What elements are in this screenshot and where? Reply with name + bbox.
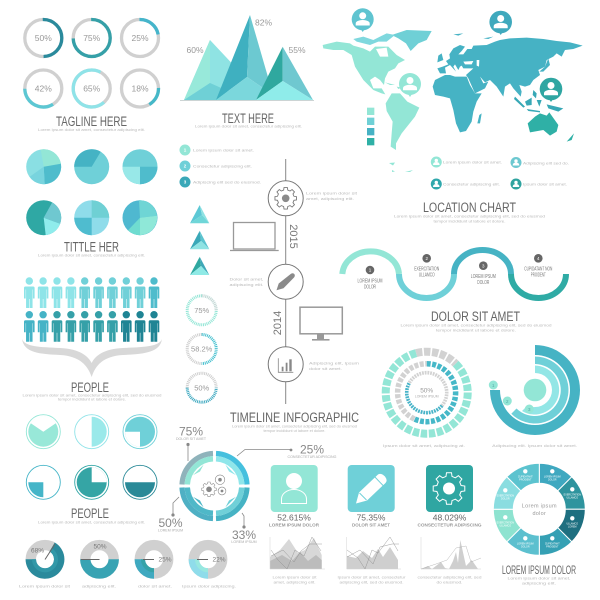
step 4 [524, 254, 552, 278]
fraction circle 3 [123, 415, 157, 449]
step 1: LOREM IPSUM [358, 278, 383, 284]
chart caption 3: consectetur adipiscing elit, sed [418, 574, 482, 580]
callout 25%: 25% [300, 442, 324, 456]
chart caption 3 [418, 574, 482, 584]
chart: area 1 [270, 537, 325, 569]
Japan [539, 58, 550, 72]
Eurasia [437, 38, 583, 97]
Australia [528, 112, 574, 142]
step 3: 3 [482, 263, 485, 268]
donut 50%: 50% [93, 544, 107, 550]
donut 68%: 68% [31, 548, 44, 554]
numbered list: Lorem ipsum dolor sit amet. [193, 148, 254, 152]
text: caption: Lorem ipsum dolor sit amet, consectetur adipiscing elit. [38, 252, 145, 258]
panel: people pictogram [22, 277, 162, 377]
value: 52.615% [277, 513, 311, 523]
segment labels: CUPIDATANT [545, 542, 560, 545]
chart: segmented ring [493, 463, 585, 555]
triangle 3 [190, 257, 209, 275]
text: caption: Lorem ipsum dolor sit amet, consectetur adipiscing elit. [38, 520, 145, 524]
callout 50%: LOREM IPSUM [158, 528, 183, 532]
numbered list: 3 [184, 180, 187, 185]
ring 75% [73, 20, 110, 56]
center value: 50% [420, 388, 433, 394]
segment labels: LOREM IPSUM [517, 542, 534, 545]
panel: triangles [190, 205, 209, 275]
text: caption [394, 214, 545, 224]
chart: wave steps [342, 250, 566, 298]
center text [522, 503, 557, 517]
Eastern hemisphere [433, 33, 583, 142]
segment labels: EXERCITATION [497, 494, 514, 497]
tile: pencil [348, 465, 395, 512]
Arctic islands [353, 33, 395, 45]
triangle 2 [190, 231, 209, 249]
text: pencil note [230, 276, 264, 287]
numbered list: 2 [184, 164, 187, 169]
pie 2 [74, 149, 109, 184]
text: caption: Lorem ipsum dolor sit amet, consectetur adipiscing elit, sed do eiusmod [400, 322, 552, 328]
segment labels: LOREM [568, 525, 577, 528]
wave segment 2 [399, 274, 454, 298]
text: caption: tempor incididunt ut labore et dolore. [58, 396, 126, 402]
text: caption: tempor incididunt ut labore et dolore. [434, 218, 506, 224]
Greenland [392, 30, 432, 51]
text: gear note: amet, adipiscing elit. [306, 196, 354, 201]
icon: gear node [268, 181, 303, 216]
callout 75%: DOLOR SIT AMET [176, 437, 207, 441]
text: chart note: Adipiscing elit, Ipsum [309, 360, 360, 366]
donut captions: adipiscing elit. [82, 584, 116, 588]
heading: dolor sit amet: DOLOR SIT AMET [431, 309, 520, 324]
map legend [431, 156, 569, 190]
segment labels [497, 469, 581, 548]
dotted ring 75%: 75% [194, 306, 210, 315]
callout 25% [237, 442, 337, 459]
label 60%: 60% [186, 45, 204, 55]
text: caption: adipiscing elit. [522, 580, 556, 586]
callout 33%: LOREM IPSUM [231, 540, 257, 544]
icon: monitor [300, 307, 342, 341]
chart caption 1: Lorem ipsum dolor sit [272, 574, 318, 580]
value: 75.35% [357, 513, 386, 523]
South America [386, 93, 419, 150]
segment labels: ULLAMCO [500, 524, 511, 527]
text: caption [22, 392, 162, 402]
ring 50% [25, 20, 62, 56]
brace [22, 339, 162, 377]
callout 33% [231, 513, 257, 544]
text: chart note: dolor sit amet. [309, 366, 342, 371]
ring 18% [122, 70, 158, 107]
chart: mountains [180, 15, 314, 101]
ring quadrants [182, 454, 247, 518]
text: caption: tempor incididunt ut labore et dolore. [264, 428, 326, 433]
step 3: LOREM IPSUM [471, 274, 496, 280]
segment labels: EXERCITATION [564, 493, 581, 496]
label 55%: 55% [288, 45, 306, 55]
ring 75%: 75% [83, 33, 101, 43]
pie 1 [26, 149, 61, 184]
donut captions: Lorem ipsum dolor sit [19, 584, 71, 588]
pie 3 [122, 149, 158, 184]
Arctic specks [453, 33, 493, 39]
segment labels: ULLAMCO [567, 522, 578, 525]
chart caption 1: amet, adipiscing elit. [274, 580, 316, 584]
segment labels: DOLOR [501, 497, 510, 500]
text: caption: Lorem ipsum dolor sit amet, [508, 576, 570, 580]
heading: people 2: PEOPLE [71, 506, 109, 521]
heading: tittle her: TITTLE HER [64, 240, 119, 254]
text: radial caption: Adipiscing elit. Ipsum dolor sit amet. [492, 443, 577, 448]
donut 25% [140, 545, 172, 574]
ring 42%: 42% [35, 84, 52, 94]
donut 25%: 25% [158, 556, 172, 564]
heading: timeline infographic: TIMELINE INFOGRAPHIC [230, 410, 359, 425]
fraction circle 2 [75, 415, 109, 449]
marker 1: 1 [492, 383, 495, 388]
segment labels: DOLOR [521, 545, 530, 548]
pie 6 [122, 200, 158, 235]
chart caption 2: Ipsum dolor sit amet, consectetur [338, 574, 406, 580]
dotted ring 50%: 50% [194, 383, 210, 392]
chart: concentric segmented rings [386, 352, 468, 434]
value: 48.029% [433, 513, 467, 523]
numbered list: Adipiscing elit sed do eiusmod. [193, 180, 261, 184]
callout 75%: 75% [179, 424, 203, 438]
text: caption [508, 576, 570, 586]
text: chart note [309, 360, 360, 371]
center disc [524, 379, 546, 401]
Africa [433, 75, 482, 132]
donut 22% [194, 545, 226, 574]
step 2: EXERCITATION [414, 266, 439, 272]
callout 50% [158, 497, 183, 532]
donut captions [19, 584, 236, 588]
panel: world map [323, 30, 583, 172]
panel: dotted progress rings [187, 296, 216, 402]
text: gear note: Lorem ipsum dolor sit [306, 190, 358, 196]
heading: text here: TEXT HERE [222, 111, 274, 126]
triangle 1 [190, 205, 209, 223]
step 4: CUPIDATANT NON [524, 266, 552, 272]
map legend: Ipsum dolor sit amet. [523, 182, 567, 186]
wave segment 1 [342, 251, 399, 274]
step 3: DOLOR [477, 280, 489, 286]
label: LOREM IPSUM DOLOR [269, 522, 320, 528]
center text: Lorem ipsum [522, 503, 557, 509]
fraction circle 6 [123, 465, 157, 499]
ring 18%: 18% [131, 84, 149, 94]
text: caption: Lorem ipsum dolor sit amet, consectetur adipiscing elit, sed do eiusmod [22, 392, 162, 398]
step 4: PROIDENT [531, 272, 546, 278]
chart: area 3 [421, 537, 481, 569]
map pin 2 [489, 11, 512, 35]
ring 65%: 65% [83, 84, 101, 94]
step 2: 2 [425, 256, 428, 261]
pie 4 [26, 200, 61, 235]
icon: gears [202, 475, 226, 497]
Britain [437, 53, 443, 62]
heading: people: PEOPLE [71, 380, 109, 395]
callout 75% [176, 424, 207, 461]
text: caption [400, 322, 552, 332]
step 1: 1 [369, 268, 372, 273]
wave segment 4 [511, 274, 566, 298]
text: caption: Lorem ipsum dolor sit amet, consectetur adipiscing elit. [195, 124, 302, 128]
year 2014: 2014 [272, 311, 284, 335]
segment labels: LOREM IPSUM [544, 475, 561, 478]
map pin 4 [540, 78, 562, 102]
donut 68% [31, 544, 59, 574]
text: caption: tempor incididunt ut labore et dolore. [436, 328, 516, 332]
year 2015: 2015 [287, 224, 299, 249]
chart caption 2 [338, 574, 406, 584]
text: pencil note: adipiscing elit. [230, 282, 264, 287]
donut captions: Ipsum dolor adipiscing. [182, 584, 236, 588]
segment labels: ULLAMCO [567, 496, 578, 499]
segment labels: PROIDENT [519, 478, 532, 481]
text: tagline caption: Lorem ipsum dolor sit amet, consectetur adipiscing elit. [38, 127, 145, 132]
icon: pencil node [268, 264, 303, 299]
segment labels: EXERCITATION [497, 521, 514, 524]
step 3 [471, 261, 496, 286]
ring 65% [66, 62, 118, 115]
Hudson Bay [376, 48, 388, 57]
step 1 [358, 266, 383, 290]
icon: laptop [230, 222, 279, 250]
ring 25%: 25% [131, 33, 149, 43]
ring 50%: 50% [35, 33, 52, 43]
North America [323, 42, 405, 94]
South islands [389, 162, 413, 172]
chart caption 1 [272, 574, 318, 584]
ring 42% [18, 63, 69, 114]
callout 50%: 50% [158, 516, 183, 530]
center label: LOREM IPSUM [415, 394, 439, 398]
segment labels: DOLOR [548, 478, 557, 481]
label 82%: 82% [255, 18, 272, 28]
panel: needle donuts [19, 544, 236, 588]
Caribbean [385, 82, 402, 89]
heading: tagline: TAGLINE HERE [56, 114, 127, 129]
icon: bar chart node [268, 347, 303, 382]
step 1: DOLOR [364, 284, 376, 290]
fraction circle 5 [75, 465, 109, 499]
callout 33%: 33% [232, 528, 256, 542]
map legend: Consectetur adipiscing elit. [443, 182, 500, 186]
donut captions: dolor sit amet. [138, 584, 172, 588]
Indonesia [514, 90, 563, 112]
text: caption: Lorem ipsum dolor sit amet, consectetur adipiscing elit, sed do eiusmod [232, 424, 357, 428]
step 4: 4 [537, 256, 540, 261]
tile: gear [426, 465, 473, 512]
map legend: Adipiscing elit sed do. [523, 160, 569, 166]
dotted ring 58.2%: 58.2% [191, 345, 213, 354]
Black Sea and Caspian [463, 60, 479, 67]
numbered list: 1 [184, 148, 187, 153]
segment labels: PROIDENT [546, 545, 559, 548]
ring 25% [122, 20, 158, 56]
wave segment 3 [454, 250, 511, 274]
donut 50% [81, 544, 114, 574]
donut 22%: 22% [212, 556, 226, 564]
text: rings caption: Ipsum dolor sit amet, adipiscing at. [383, 443, 465, 448]
numbered list [180, 144, 261, 188]
chart caption 2: adipiscing elit, sed do eiusmod. [340, 580, 404, 584]
center text: dolor [532, 511, 546, 517]
fraction circle 1 [26, 415, 60, 449]
panel: gear ring chart [158, 424, 337, 544]
text: caption: Lorem ipsum dolor sit amet, consectetur adipiscing elit, sed do eiusmod [394, 214, 545, 218]
chart caption 3: do eiusmod. [436, 580, 462, 584]
numbered list: Consectetur adipiscing elit. [193, 164, 252, 168]
marker 3: 3 [528, 407, 531, 412]
step 2 [414, 254, 439, 278]
panel: icon tiles [269, 465, 482, 528]
legend swatches [367, 108, 374, 145]
step 2: ULLAMCO [419, 272, 435, 278]
Americas and Arctic [323, 30, 432, 150]
map pin 1 [352, 8, 374, 32]
panel: progress rings [18, 20, 158, 115]
fraction circle 4 [26, 465, 60, 499]
callout 25%: CONSECTETUR ADIPISCING [288, 455, 337, 459]
chart: area 2 [347, 537, 401, 569]
text: caption [232, 424, 357, 433]
map legend: Lorem ipsum dolor sit amet. [443, 160, 502, 164]
text: pencil note: Dolor sit amet, [230, 276, 264, 282]
segment labels: CUPIDATANT [518, 475, 533, 478]
label: CONSECTETUR ADIPISCING [418, 522, 482, 528]
marker 2: 2 [506, 399, 509, 404]
text: gear note [306, 190, 358, 201]
heading: location chart: LOCATION CHART [423, 200, 516, 215]
tile: person [271, 465, 318, 512]
chart: radial bars [489, 345, 580, 435]
panel: vertical timeline [230, 159, 360, 404]
panel: pie charts [26, 149, 158, 235]
map pin 3 [399, 73, 421, 97]
label: DOLOR SIT AMET [352, 522, 390, 528]
panel: fraction circles [26, 415, 157, 499]
pie 5 [74, 200, 109, 235]
